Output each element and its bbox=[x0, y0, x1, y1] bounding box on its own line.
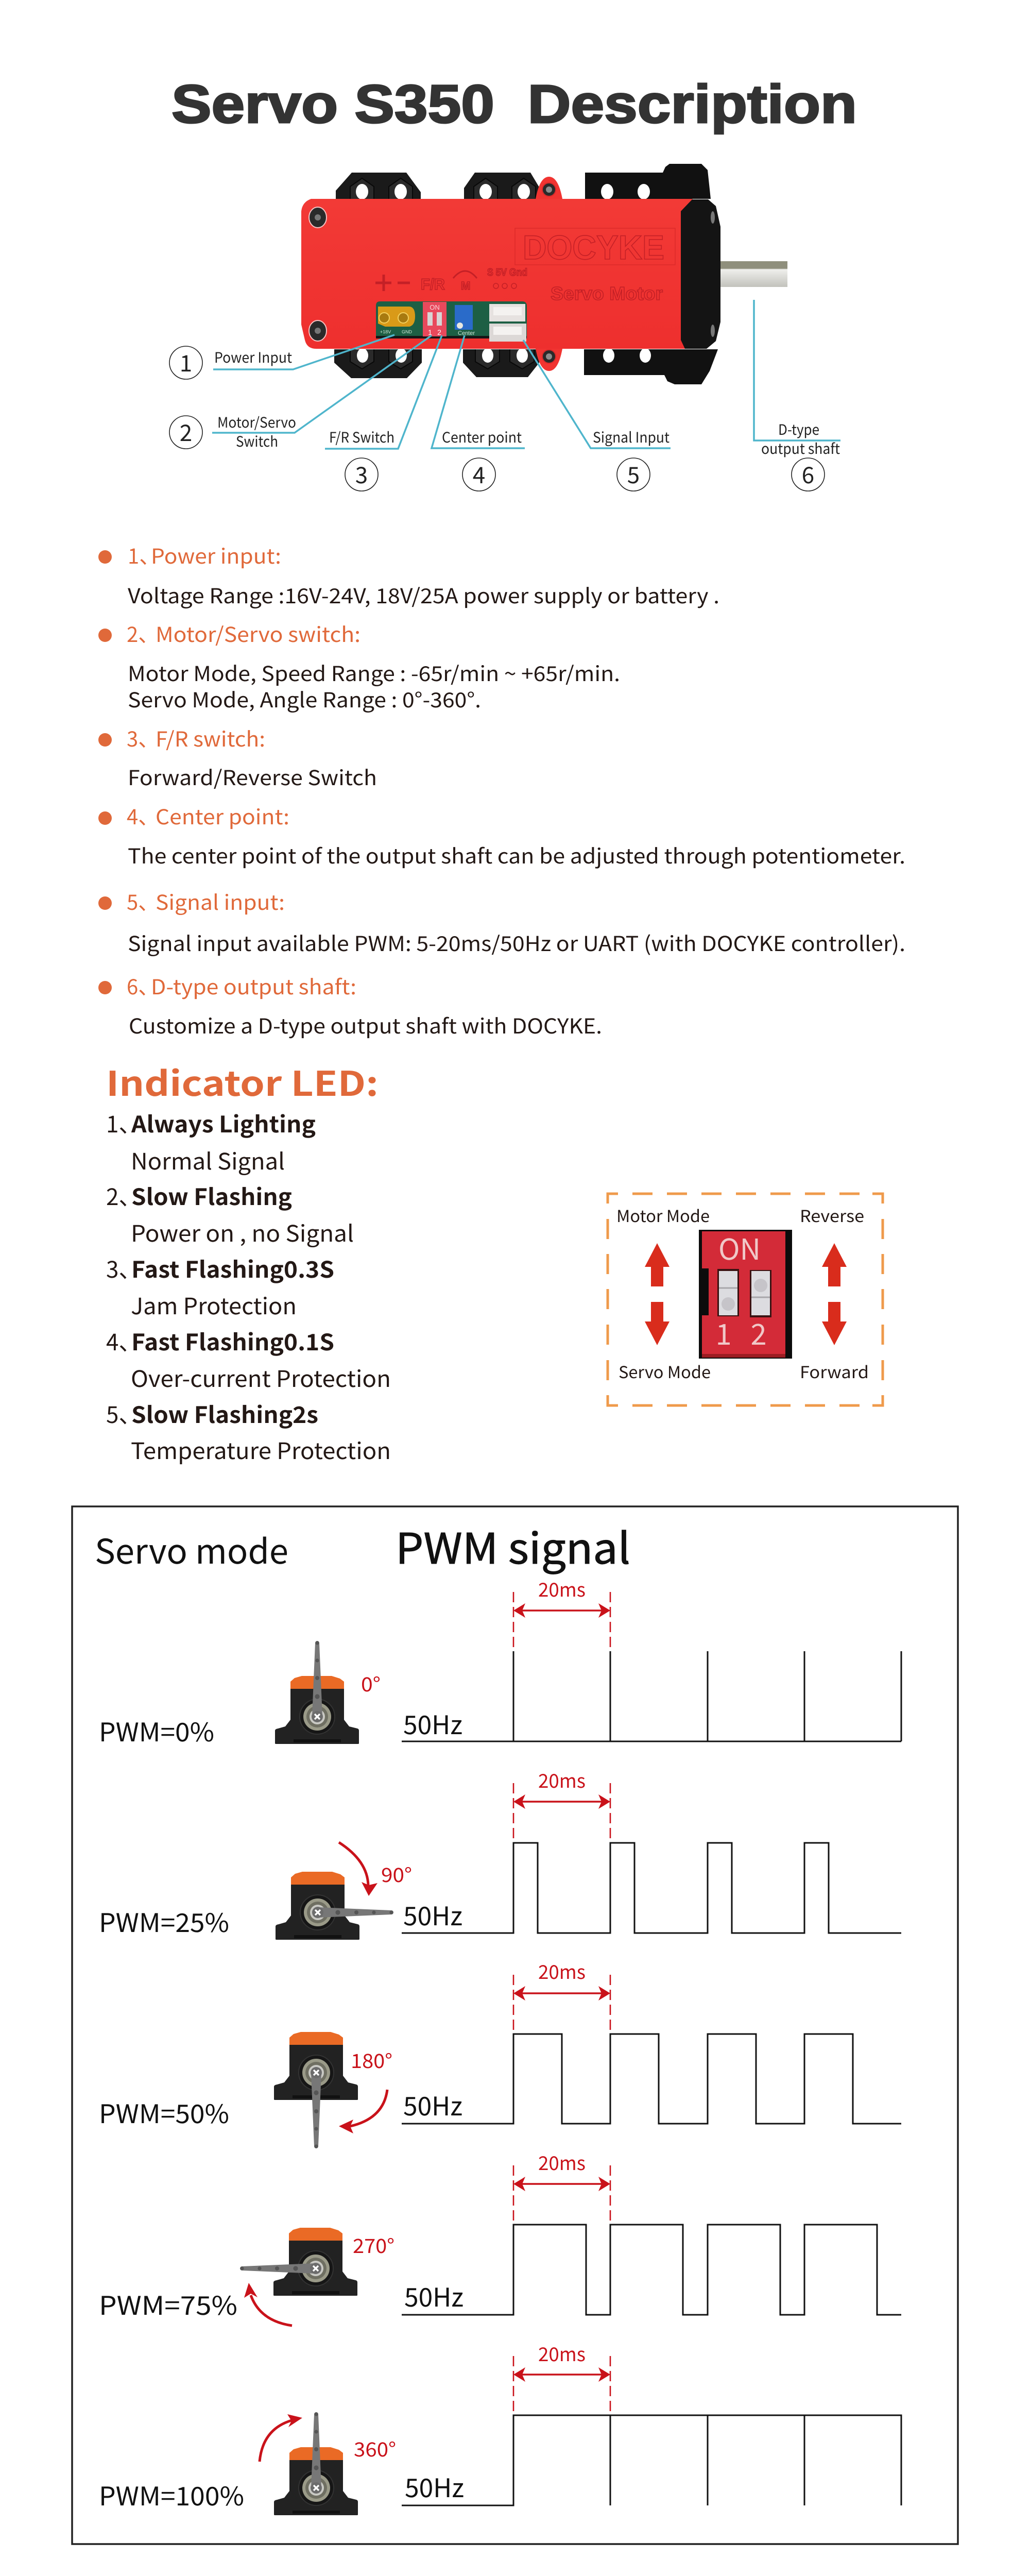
circuit board window bbox=[376, 301, 527, 342]
DIP switch photo bbox=[699, 1227, 792, 1359]
item 2: motor/servo switch: Motor Mode, Speed Range : -65r/min ~ +65r/min. bbox=[128, 657, 620, 687]
item 5: signal input: 5、 bbox=[127, 886, 159, 916]
embossed port marks: F/R bbox=[421, 276, 445, 293]
item 4: center point bbox=[98, 801, 905, 870]
item 2: motor/servo switch: Servo Mode, Angle Range : 0°-360°. bbox=[128, 684, 481, 714]
LED state 3: 3、 bbox=[106, 1251, 141, 1284]
heading: Indicator LED: Indicator LED: bbox=[106, 1057, 379, 1106]
callout 2: Motor/Servo Switch: Motor/Servo bbox=[217, 412, 296, 432]
indicator LED list bbox=[106, 1106, 391, 1466]
LED state 1 bbox=[106, 1106, 316, 1176]
circuit board window: 1 bbox=[428, 328, 432, 336]
title: Servo S350 Description bbox=[171, 74, 857, 134]
DIP switch photo: ON bbox=[718, 1227, 761, 1268]
item 6: D-type output shaft: 6、 bbox=[127, 971, 159, 1001]
label: Motor Mode: Motor Mode bbox=[616, 1204, 710, 1227]
circuit board window: ON bbox=[430, 303, 440, 311]
embossed logo DOCYKE: DOCYKE bbox=[523, 228, 664, 266]
callout 6: D-type output shaft: output shaft bbox=[761, 438, 840, 459]
item 5: signal input bbox=[98, 886, 905, 957]
feature description list bbox=[98, 540, 905, 1040]
row: PWM=75% servo bbox=[99, 2148, 901, 2326]
label: Servo Mode: Servo Mode bbox=[619, 1360, 711, 1383]
potentiometer bbox=[455, 305, 473, 330]
row: PWM=25% servo bbox=[99, 1766, 901, 1940]
callout 4: Center point bbox=[432, 335, 525, 491]
row: PWM=50% servo: 20ms bbox=[538, 1957, 586, 1985]
row: PWM=50% servo bbox=[99, 1957, 901, 2148]
panel frame bbox=[72, 1506, 958, 2544]
item 1: power input: Power input: bbox=[151, 540, 281, 570]
callout 4: Center point: 4 bbox=[473, 457, 485, 490]
row: PWM=50% servo: 180° bbox=[351, 2045, 392, 2074]
panel label: Servo mode: Servo mode bbox=[95, 1524, 288, 1574]
row: PWM=100% servo: 360° bbox=[354, 2434, 396, 2462]
DIP switch photo: 1 bbox=[715, 1312, 732, 1353]
item 4: center point: Center point: bbox=[156, 801, 289, 831]
LED state 4 bbox=[106, 1324, 391, 1394]
callout 3: F/R Switch: 3 bbox=[355, 457, 368, 490]
row: PWM=25% servo: 90° bbox=[381, 1859, 412, 1888]
row: PWM=50% servo: 50Hz bbox=[403, 2086, 462, 2123]
callout 1: Power Input bbox=[169, 335, 394, 379]
embossed port marks bbox=[375, 267, 527, 293]
callout 5: Signal Input: Signal Input bbox=[593, 427, 670, 447]
item 1: power input: Voltage Range :16V-24V, 18V/25A power supply or battery . bbox=[128, 580, 719, 609]
callout 1: Power Input: Power Input bbox=[214, 347, 292, 367]
LED state 3 bbox=[106, 1251, 334, 1321]
circuit board window: +18V bbox=[380, 329, 391, 334]
callout 6: D-type output shaft: D-type bbox=[778, 419, 819, 439]
circuit board window: 2 bbox=[437, 328, 441, 336]
item 6: D-type output shaft: D-type output shaft: bbox=[151, 971, 356, 1001]
black end cap bbox=[681, 199, 720, 349]
LED state 2: 2、 bbox=[106, 1179, 141, 1212]
row: PWM=0% servo: PWM=0% bbox=[99, 1712, 214, 1749]
label: Forward: Forward bbox=[800, 1360, 869, 1383]
LED state 5: Slow Flashing2s bbox=[131, 1397, 318, 1430]
row: PWM=75% servo: PWM=75% bbox=[99, 2285, 237, 2323]
dashed frame bbox=[608, 1194, 883, 1405]
row: PWM=50% servo: PWM=50% bbox=[99, 2094, 229, 2131]
LED state 3: Fast Flashing0.3S bbox=[131, 1251, 334, 1284]
product photo: servo motor bbox=[301, 164, 787, 384]
callout 4: Center point: Center point bbox=[442, 427, 522, 447]
callout 6: D-type output shaft: 6 bbox=[802, 457, 814, 490]
LED state 4: Fast Flashing0.1S bbox=[131, 1324, 334, 1357]
row: PWM=0% servo bbox=[99, 1574, 901, 1749]
row: PWM=75% servo: 270° bbox=[353, 2230, 394, 2259]
panel heading: PWM signal: PWM signal bbox=[396, 1515, 630, 1576]
row: PWM=100% servo bbox=[99, 2339, 901, 2515]
row: PWM=0% servo: 50Hz bbox=[403, 1705, 462, 1742]
LED state 1: 1、 bbox=[106, 1106, 141, 1139]
row: PWM=75% servo: 50Hz bbox=[404, 2277, 464, 2314]
output shaft bbox=[720, 261, 787, 287]
item 2: motor/servo switch: Motor/Servo switch: bbox=[156, 618, 360, 648]
callout 2: Motor/Servo Switch: Switch bbox=[236, 431, 278, 451]
callout 3: F/R Switch: F/R Switch bbox=[329, 427, 394, 447]
row: PWM=100% servo: 20ms bbox=[538, 2339, 586, 2367]
arrows: reverse / forward bbox=[822, 1243, 847, 1345]
callouts: numbered labels and leader lines bbox=[169, 300, 840, 491]
item 3: F/R switch bbox=[98, 723, 377, 791]
item 2: motor/servo switch: 2、 bbox=[127, 618, 159, 648]
circuit board window: Center bbox=[458, 330, 475, 336]
dip switch bbox=[423, 302, 447, 336]
item 5: signal input: Signal input: bbox=[156, 886, 285, 916]
item 3: F/R switch: 3、 bbox=[127, 723, 159, 753]
item 4: center point: The center point of the output shaft can be adjusted through potentiometer. bbox=[128, 840, 905, 870]
item 3: F/R switch: Forward/Reverse Switch bbox=[128, 761, 377, 791]
DIP switch photo: 2 bbox=[750, 1312, 767, 1353]
callout 2: Motor/Servo Switch: 2 bbox=[180, 415, 192, 448]
row: PWM=25% servo: 20ms bbox=[538, 1766, 586, 1793]
LED state 1: Always Lighting bbox=[131, 1106, 316, 1139]
embossed port marks: M bbox=[461, 279, 470, 292]
row: PWM=75% servo: 20ms bbox=[538, 2148, 586, 2176]
callout 2: Motor/Servo Switch bbox=[169, 335, 432, 451]
label: Reverse: Reverse bbox=[800, 1204, 864, 1227]
LED state 4: Over-current Protection bbox=[131, 1361, 391, 1394]
callout 3: F/R Switch bbox=[325, 335, 442, 491]
callout 6: D-type output shaft bbox=[754, 300, 840, 491]
item 1: power input bbox=[98, 540, 719, 609]
embossed port marks: S 5V Gnd bbox=[487, 267, 527, 278]
panel: Servo mode PWM signal bbox=[72, 1506, 958, 2544]
LED state 2 bbox=[106, 1179, 354, 1248]
signal connectors bbox=[489, 304, 525, 321]
LED state 5: Temperature Protection bbox=[131, 1433, 391, 1466]
LED state 2: Power on , no Signal bbox=[131, 1215, 354, 1248]
power connector bbox=[378, 307, 415, 327]
row: PWM=0% servo: 20ms bbox=[538, 1574, 586, 1602]
LED state 1: Normal Signal bbox=[131, 1143, 285, 1176]
embossed label Servo Motor: Servo Motor bbox=[551, 283, 663, 304]
item 4: center point: 4、 bbox=[127, 801, 159, 831]
row: PWM=100% servo: 50Hz bbox=[405, 2468, 464, 2505]
item 3: F/R switch: F/R switch: bbox=[156, 723, 265, 753]
row: PWM=25% servo: 50Hz bbox=[403, 1896, 462, 1933]
LED state 3: Jam Protection bbox=[131, 1288, 297, 1321]
LED state 4: 4、 bbox=[106, 1324, 141, 1357]
circuit board window: GND bbox=[402, 329, 412, 334]
row: PWM=25% servo: PWM=25% bbox=[99, 1903, 229, 1940]
callout 5: Signal Input: 5 bbox=[627, 457, 640, 490]
arrows: motor / servo mode bbox=[645, 1243, 670, 1345]
callout 1: Power Input: 1 bbox=[180, 345, 192, 378]
row: PWM=100% servo: PWM=100% bbox=[99, 2476, 244, 2513]
item 6: D-type output shaft: Customize a D-type output shaft with DOCYKE. bbox=[129, 1010, 602, 1040]
DIP switch legend box bbox=[608, 1194, 883, 1405]
item 6: D-type output shaft bbox=[98, 971, 602, 1040]
red housing bbox=[301, 199, 693, 349]
screw ears bbox=[309, 177, 715, 371]
LED state 2: Slow Flashing bbox=[131, 1179, 292, 1212]
item 1: power input: 1、 bbox=[128, 540, 160, 570]
LED state 5: 5、 bbox=[106, 1397, 141, 1430]
item 5: signal input: Signal input available PWM: 5-20ms/50Hz or UART (with DOCYKE controller). bbox=[128, 927, 905, 957]
row: PWM=0% servo: 0° bbox=[361, 1669, 381, 1697]
callout 5: Signal Input bbox=[523, 340, 671, 491]
LED state 5 bbox=[106, 1397, 391, 1466]
mounting brackets bbox=[334, 164, 718, 384]
item 2: motor/servo switch bbox=[98, 618, 620, 714]
